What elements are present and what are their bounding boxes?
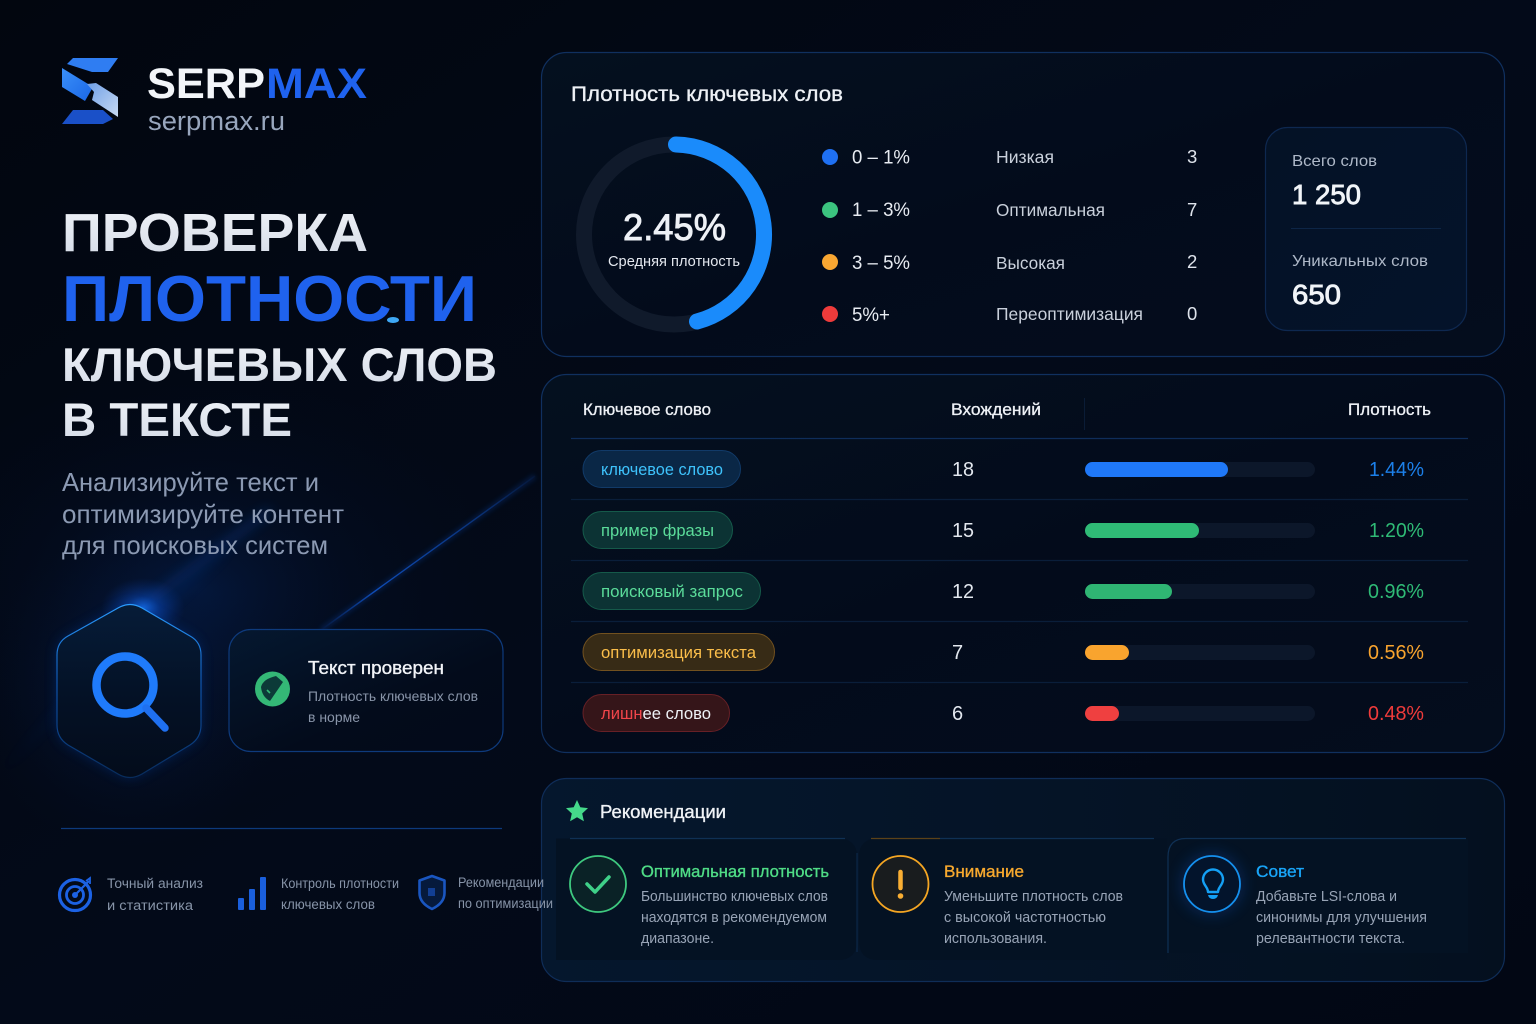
subtitle: оптимизируйте контент	[62, 499, 344, 529]
card: optimal density: диапазоне.	[641, 931, 714, 947]
legend: 3 – 5%	[852, 253, 910, 274]
legend labels: Переоптимизация	[996, 304, 1143, 324]
logo	[62, 58, 367, 136]
heading: Рекомендации	[600, 801, 726, 822]
icon: green check	[255, 672, 290, 706]
logo mark	[62, 58, 118, 124]
table header: Плотность	[1348, 401, 1431, 419]
legend counts: 2	[1187, 251, 1197, 272]
card: warning: Внимание	[944, 862, 1024, 881]
donut chart: 2.45%	[623, 207, 726, 248]
title: ПЛОТНОСТИ	[62, 262, 477, 335]
feature: accurate analysis: и статистика	[107, 898, 194, 913]
row: лишнее слово	[583, 694, 1424, 732]
title: КЛЮЧЕВЫХ СЛОВ	[62, 338, 497, 391]
status card: Плотность ключевых слов	[308, 688, 478, 704]
table header	[583, 401, 1431, 419]
table header: Вхождений	[951, 401, 1041, 419]
card: tip: релевантности текста.	[1256, 931, 1405, 947]
feature: density control: Контроль плотности	[281, 876, 399, 891]
feature: accurate analysis: Точный анализ	[107, 876, 203, 891]
legend labels	[996, 147, 1143, 324]
feature: accurate analysis	[60, 876, 203, 913]
legend labels: Оптимальная	[996, 200, 1105, 220]
icon: star	[566, 800, 588, 821]
row: поисковый запрос: поисковый запрос	[601, 583, 743, 601]
row: пример фразы: пример фразы	[601, 522, 714, 540]
stats card: Уникальных слов	[1292, 253, 1428, 270]
status card	[229, 630, 503, 752]
legend	[822, 148, 910, 326]
feature: optimization tips: Рекомендации	[458, 875, 544, 890]
panel: keyword table	[542, 374, 1504, 752]
row: лишнее слово: 0.48%	[1368, 702, 1424, 725]
stats card: 1 250	[1292, 179, 1361, 210]
row: оптимизация текста	[583, 634, 1424, 670]
row: ключевое слово	[583, 450, 1424, 488]
row: поисковый запрос: 12	[952, 581, 974, 603]
row: ключевое слово: 18	[952, 459, 974, 481]
donut chart	[584, 144, 764, 324]
title	[62, 203, 497, 446]
row: оптимизация текста: оптимизация текста	[601, 644, 757, 662]
row: оптимизация текста: 0.56%	[1368, 641, 1424, 664]
card: optimal density: Оптимальная плотность	[641, 862, 829, 881]
icon: target	[60, 878, 90, 910]
row: пример фразы	[583, 512, 1424, 548]
row: пример фразы: 15	[952, 520, 974, 542]
legend counts: 0	[1187, 303, 1197, 324]
row: ключевое слово: 1.44%	[1369, 458, 1424, 481]
feature: density control	[238, 876, 399, 912]
legend counts	[1187, 146, 1197, 324]
feature: density control: ключевых слов	[281, 897, 375, 912]
icon: shield	[420, 876, 444, 909]
card: tip: Добавьте LSI-слова и	[1256, 889, 1397, 905]
stats card: Всего слов	[1292, 153, 1377, 170]
feature: optimization tips: по оптимизации	[458, 896, 553, 911]
legend labels: Высокая	[996, 253, 1065, 273]
card: optimal density: Большинство ключевых слов	[641, 889, 828, 905]
card: optimal density	[556, 838, 857, 960]
card: warning: с высокой частотностью	[944, 910, 1106, 926]
subtitle	[62, 467, 344, 560]
card: tip	[1168, 838, 1468, 953]
row: лишнее слово: 6	[952, 703, 963, 725]
row: оптимизация текста: 7	[952, 642, 963, 664]
row: поисковый запрос	[583, 572, 1424, 610]
row: ключевое слово: ключевое слово	[601, 461, 723, 479]
icon: bars	[238, 877, 266, 910]
heading: Плотность ключевых слов	[571, 83, 843, 106]
brand name: SERP	[147, 60, 265, 108]
stats card: 650	[1292, 279, 1341, 310]
legend: 1 – 3%	[852, 200, 910, 221]
title: В ТЕКСТЕ	[62, 393, 292, 446]
legend counts: 3	[1187, 146, 1197, 167]
status text: Текст проверен	[308, 657, 444, 678]
card: warning: использования.	[944, 931, 1047, 947]
icon: search hexagon	[57, 604, 201, 778]
status card: в норме	[308, 709, 360, 725]
row: пример фразы: 1.20%	[1369, 519, 1424, 542]
panel: recommendations	[542, 778, 1504, 982]
card: optimal density: находятся в рекомендуемом	[641, 910, 827, 926]
card: warning	[859, 838, 1167, 960]
site url: serpmax.ru	[148, 106, 285, 136]
subtitle: для поисковых систем	[62, 530, 328, 560]
card: tip: Совет	[1256, 862, 1304, 881]
legend counts: 7	[1187, 199, 1197, 220]
row: поисковый запрос: 0.96%	[1368, 580, 1424, 603]
subtitle: Анализируйте текст и	[62, 467, 319, 497]
title: ПРОВЕРКА	[62, 203, 368, 263]
donut chart: Средняя плотность	[608, 254, 740, 270]
legend labels: Низкая	[996, 147, 1054, 167]
legend: 0 – 1%	[852, 148, 910, 168]
stats card	[1266, 128, 1466, 330]
legend: 5%+	[852, 305, 890, 326]
table header: Ключевое слово	[583, 401, 711, 419]
logo: MAX	[266, 60, 367, 108]
feature: optimization tips	[420, 875, 553, 911]
card: tip: синонимы для улучшения	[1256, 910, 1427, 926]
panel: keyword density	[542, 52, 1504, 356]
row: лишнее слово: лишнее слово	[601, 705, 711, 723]
card: warning: Уменьшите плотность слов	[944, 889, 1123, 905]
